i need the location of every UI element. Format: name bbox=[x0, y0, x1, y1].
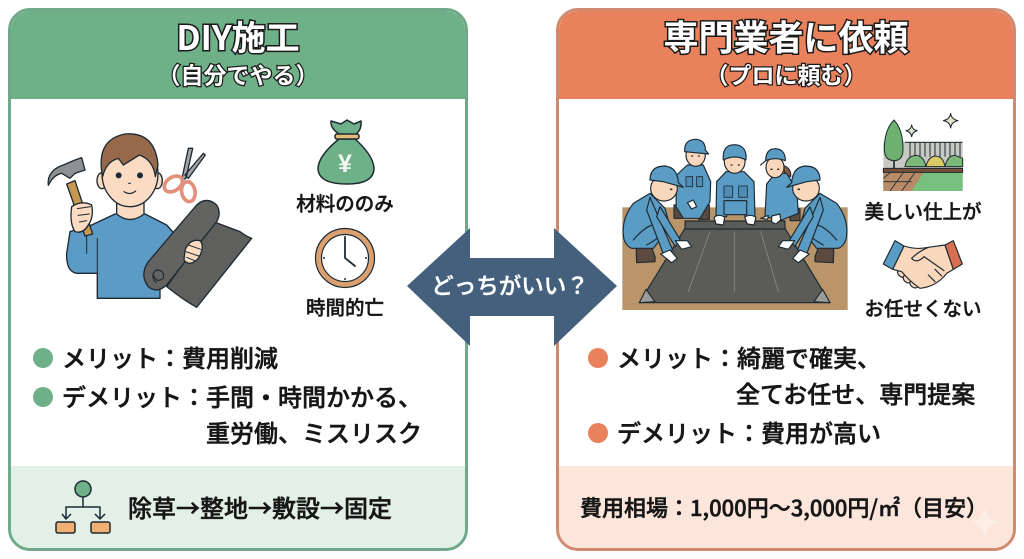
front left worker bbox=[623, 166, 692, 263]
header band: professional bbox=[559, 11, 1013, 99]
front right worker bbox=[778, 166, 847, 263]
bullet: DIY demerit bbox=[33, 387, 53, 407]
footer band: DIY bbox=[11, 466, 465, 548]
subheading: professional: （プロに頼む） bbox=[706, 56, 866, 90]
arrow label: どっちがいい？ bbox=[431, 269, 589, 301]
icon: person with hammer, scissors and roll bbox=[48, 134, 252, 307]
icon: yen mark: ¥ bbox=[338, 150, 352, 178]
icon label: time: 時間的亡 bbox=[306, 291, 384, 320]
bullet: professional merit bbox=[588, 348, 608, 368]
double arrow bbox=[407, 228, 617, 346]
heading: professional: 専門業者に依頼 bbox=[663, 10, 909, 62]
text: professional merit line 2: 全てお任せ、専門提案 bbox=[736, 375, 975, 410]
icon: workers laying sheet bbox=[622, 139, 848, 310]
back left worker bbox=[674, 139, 711, 219]
footer band: professional bbox=[559, 466, 1013, 548]
text: DIY merit: メリット：費用削減 bbox=[62, 339, 278, 374]
icon: money bag bbox=[318, 120, 374, 184]
bullet: DIY merit bbox=[33, 348, 53, 368]
icon: process flow bbox=[56, 481, 110, 533]
header band: DIY bbox=[11, 11, 465, 99]
text: price range: 費用相場：1,000円〜3,000円/㎡（目安） bbox=[580, 491, 988, 523]
back centre worker bbox=[714, 145, 756, 225]
back right worker bbox=[761, 149, 800, 224]
icon label: leave it to them: お任せくない bbox=[864, 292, 982, 321]
heading: DIY: DIY施工 bbox=[176, 11, 300, 60]
bullet: professional demerit bbox=[588, 423, 608, 443]
icon label: beautiful finish: 美しい仕上が bbox=[864, 195, 982, 224]
text: professional merit: メリット：綺麗で確実、 bbox=[617, 339, 881, 374]
icon label: materials only: 材料ののみ bbox=[296, 187, 394, 216]
icon: clock bbox=[316, 228, 374, 288]
text: DIY demerit: デメリット：手間・時間かかる、 bbox=[62, 378, 422, 413]
text: professional demerit: デメリット：費用が高い bbox=[617, 414, 881, 449]
text: DIY process: 除草→整地→敷設→固定 bbox=[128, 489, 392, 524]
panel: professional bbox=[556, 8, 1016, 551]
icon: handshake bbox=[883, 241, 962, 290]
icon: beautiful garden bbox=[883, 113, 963, 191]
text: DIY demerit line 2: 重労働、ミスリスク bbox=[206, 414, 422, 449]
watermark sparkle bbox=[970, 508, 1000, 537]
panel: DIY bbox=[8, 8, 468, 551]
subheading: DIY: （自分でやる） bbox=[158, 56, 318, 90]
